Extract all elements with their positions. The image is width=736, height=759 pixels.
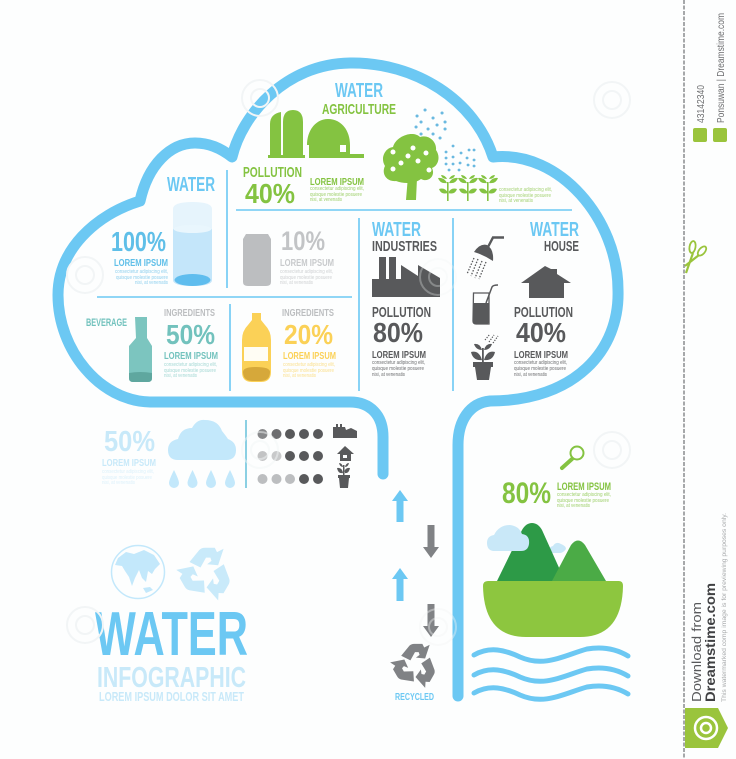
heading: water industries [372, 219, 437, 255]
stat: 20 percent: nisi, at venenatis [283, 373, 316, 379]
pollution 40 percent: nisi, at venenatis [310, 197, 342, 203]
dreamstime: Dreamstime.com [703, 583, 718, 702]
stat: pollution 40 percent: quisque molestie posuere [514, 366, 566, 372]
stat: 80 percent: 80% [502, 477, 551, 510]
heading: water industries: INDUSTRIES [372, 238, 437, 255]
pollution 40 percent: LOREM IPSUM [310, 176, 364, 188]
icon: rain drops [169, 470, 235, 488]
stat: 50 percent pale: nisi, at venenatis [102, 480, 135, 486]
stat: 10 percent [280, 226, 334, 286]
stat: 80 percent: quisque molestie posuere [557, 498, 609, 504]
crop caption: nisi, at venenatis [499, 198, 533, 204]
icon: grey recycling symbol [389, 644, 440, 688]
stat: pollution 40 percent: nisi, at venenatis [514, 372, 547, 378]
icon: cloud [487, 525, 529, 551]
icon: shower [467, 238, 504, 279]
icon: waves [474, 648, 628, 699]
icon: globe [112, 546, 164, 598]
heading: water house: HOUSE [544, 238, 579, 255]
panel: rain summary [102, 420, 357, 488]
heading: water agriculture [322, 80, 396, 118]
stat: 100 percent: nisi, at venenatis [135, 280, 168, 286]
stat: 80 percent: consectetur adipiscing elit, [557, 492, 611, 498]
pollution 40 percent: consectetur adipiscing elit, [310, 186, 364, 192]
icon: potted plant [471, 334, 498, 380]
logo: dreamstime [685, 708, 728, 748]
icon: glass of water [173, 202, 212, 286]
icon: can [243, 234, 271, 286]
pollution 40 percent: 40% [245, 178, 295, 209]
crop caption: quisque molestie posuere [499, 193, 551, 199]
icon: rain cloud [168, 420, 236, 460]
cloud and pipe outline [58, 63, 618, 696]
stat: 50 percent pale: consectetur adipiscing elit, [102, 469, 154, 475]
icon: dark mountain [497, 523, 565, 581]
panel dividers [97, 170, 572, 391]
heading: water house [530, 219, 579, 255]
stat: pollution 80 percent [372, 304, 431, 378]
panel: yellow bottle 20 percent [242, 307, 336, 382]
divider: summary [245, 420, 247, 488]
stat: 10 percent: nisi, at venenatis [280, 280, 313, 286]
heading: water industries: WATER [372, 219, 421, 241]
stat: 100 percent: 100% [111, 226, 166, 257]
download credit [689, 513, 728, 702]
heading: water agriculture: WATER [335, 80, 383, 102]
icon: yellow bottle [242, 313, 271, 382]
stat: 80 percent: nisi, at venenatis [557, 503, 590, 509]
crop caption [499, 187, 552, 204]
panel: beverage 50 percent [86, 307, 218, 382]
icon: light mountain [552, 540, 606, 581]
stat: 10 percent: 10% [281, 226, 325, 256]
heading: water house: WATER [530, 219, 579, 241]
stat: 50 percent: LOREM IPSUM [164, 350, 218, 362]
stat: 20 percent: consectetur adipiscing elit, [283, 362, 335, 368]
author credit [713, 13, 727, 142]
subtitle: infographic: INFOGRAPHIC [97, 662, 246, 694]
download from: Download from [689, 602, 704, 702]
arrow: up [392, 490, 408, 522]
icon: green bottle [129, 317, 152, 382]
icon: apple tree [383, 134, 439, 200]
pollution 40 percent: quisque molestie posuere [310, 192, 362, 198]
stat: 50 percent: nisi, at venenatis [164, 373, 197, 379]
title: water: WATER [95, 600, 248, 669]
dot rating: house [258, 451, 323, 461]
stat: 80 percent [502, 477, 611, 510]
stat: 50 percent: 50% [166, 319, 215, 350]
icon: rain dots over crops [446, 146, 474, 170]
icon: pale recycling symbol [175, 548, 236, 601]
label: beverage: BEVERAGE [86, 317, 127, 329]
icon: factory [372, 257, 440, 297]
stat: pollution 80 percent: consectetur adipiscing elit, [372, 360, 425, 366]
stat: pollution 40 percent: consectetur adipiscing elit, [514, 360, 567, 366]
stat: 10 percent: quisque molestie posuere [280, 275, 332, 281]
icon: small cloud [549, 543, 566, 553]
stat: pollution 40 percent [514, 304, 573, 378]
stat: 50 percent pale: LOREM IPSUM [102, 457, 156, 469]
title [95, 600, 248, 704]
icon: small house [337, 446, 354, 461]
stat: pollution 40 percent: 40% [516, 317, 566, 348]
icon: small plant [337, 463, 350, 488]
stat: 100 percent: consectetur adipiscing elit, [115, 269, 168, 275]
panel: water glass 100 percent [111, 174, 215, 286]
stat: 100 percent: LOREM IPSUM [114, 257, 168, 269]
stat: pollution 40 percent: POLLUTION [514, 304, 573, 321]
heading: water agriculture: AGRICULTURE [322, 101, 396, 118]
panel: nature 80 percent [474, 446, 628, 699]
icon: author badge [713, 128, 727, 142]
stat: pollution 80 percent: nisi, at venenatis [372, 372, 405, 378]
stat: 20 percent [282, 307, 336, 379]
dot rating: industries [258, 429, 323, 439]
stat: pollution 40 percent: LOREM IPSUM [514, 349, 568, 361]
icon: barn [307, 119, 364, 158]
stat: 20 percent: quisque molestie posuere [283, 368, 334, 374]
stat: 20 percent: LOREM IPSUM [283, 350, 336, 362]
stat: 50 percent: consectetur adipiscing elit, [164, 362, 217, 368]
arrow: down [423, 525, 439, 558]
preview note: This watermarked comp image is for previewing purposes only. [722, 513, 728, 702]
icon: magnifier [562, 446, 584, 468]
icon: three sprouts [438, 175, 498, 201]
stat: pollution 80 percent: quisque molestie posuere [372, 366, 424, 372]
icon: small factory [333, 424, 357, 438]
stat: 50 percent: INGREDIENTS [164, 307, 215, 319]
cut line [683, 0, 685, 759]
arrow: up [392, 568, 408, 601]
stat: 100 percent [111, 226, 168, 286]
stat: 50 percent pale: quisque molestie posuere [102, 475, 152, 481]
stat: 100 percent: quisque molestie posuere [116, 275, 168, 281]
stat: 10 percent: consectetur adipiscing elit, [280, 269, 333, 275]
stat: 80 percent: LOREM IPSUM [557, 481, 611, 493]
icon: id badge [693, 128, 707, 142]
icon: green bowl [483, 581, 623, 637]
stat: pollution 80 percent: POLLUTION [372, 304, 431, 321]
dot rating: plant [258, 474, 323, 484]
stat: 20 percent: 20% [284, 319, 333, 350]
stat: 20 percent: INGREDIENTS [282, 307, 334, 319]
watermark spirals [67, 80, 630, 645]
crop caption: consectetur adipiscing elit, [499, 187, 552, 193]
stat: 10 percent: LOREM IPSUM [280, 257, 334, 269]
arrow: down [423, 604, 439, 637]
stock number: 43142340 [695, 85, 707, 123]
stat: pollution 80 percent: 80% [373, 317, 423, 348]
icon: house [521, 266, 571, 298]
stat: 50 percent: quisque molestie posuere [164, 368, 216, 374]
icon: scissors [685, 241, 708, 273]
icon: silos [268, 110, 305, 158]
stock id [693, 85, 707, 142]
heading: water: WATER [167, 174, 215, 196]
stat: 50 percent pale [102, 426, 156, 486]
stat: pollution 80 percent: LOREM IPSUM [372, 349, 426, 361]
panel: water agriculture [243, 80, 552, 209]
pollution 40 percent: POLLUTION [243, 164, 302, 181]
label: recycled: RECYCLED [395, 692, 434, 703]
panel: can 10 percent [243, 226, 334, 286]
stat: 50 percent pale: 50% [104, 426, 155, 458]
panel: water industries [372, 219, 440, 378]
panel: water house [467, 219, 579, 380]
stat: 50 percent [164, 307, 218, 379]
tagline: LOREM IPSUM DOLOR SIT AMET [99, 690, 244, 704]
icon: rain dots over tree [416, 110, 445, 138]
pollution 40 percent [243, 164, 364, 209]
icon: drinking glass [473, 285, 498, 324]
